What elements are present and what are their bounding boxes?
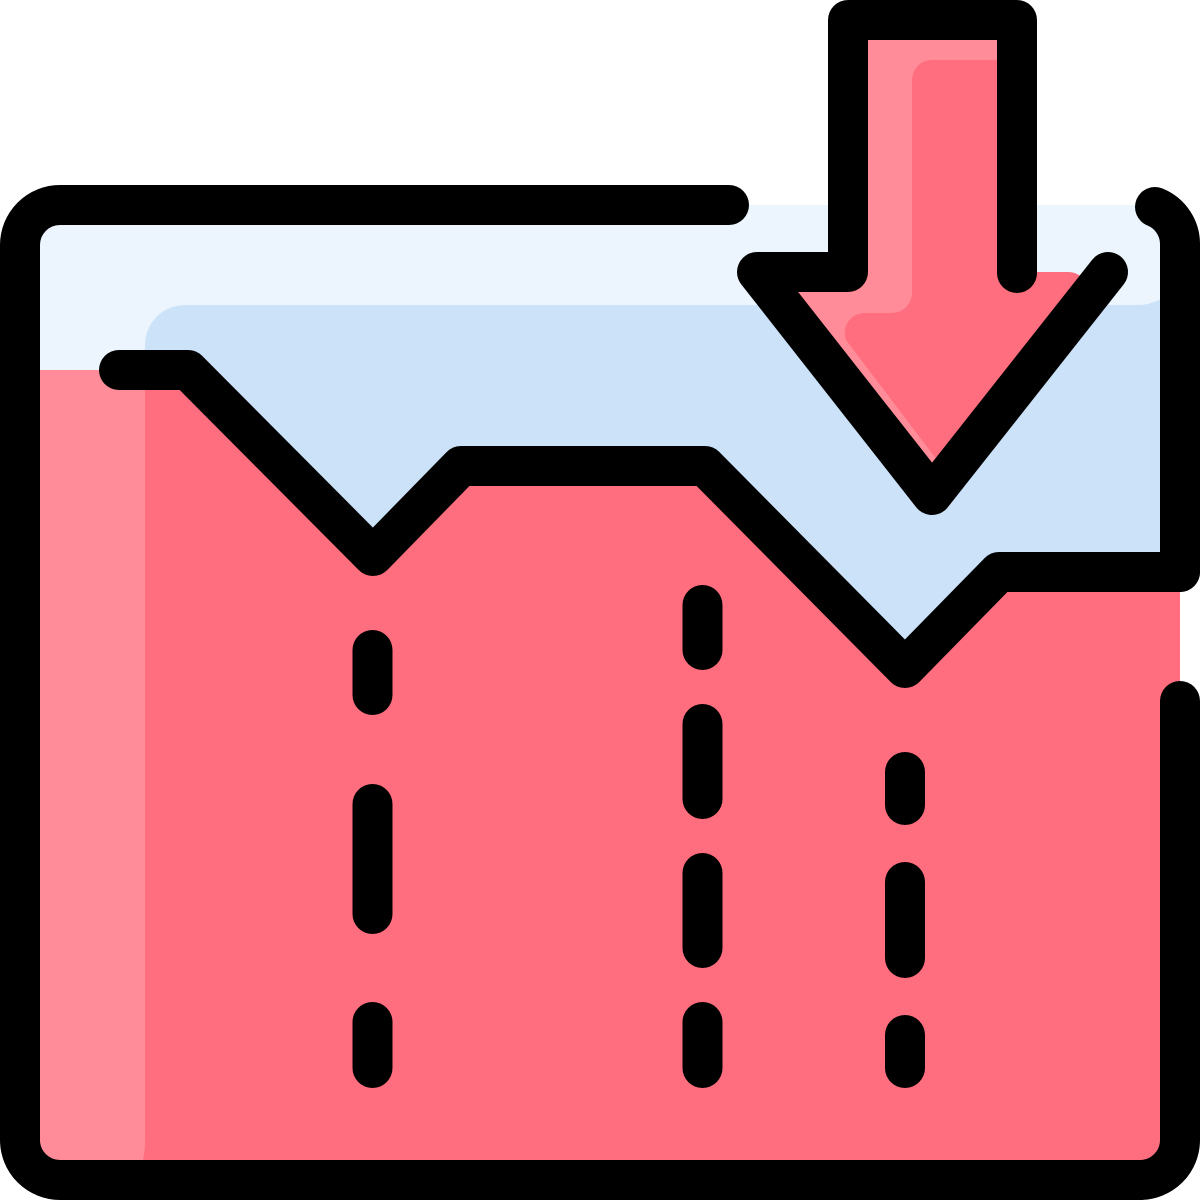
dashed drop line 2 [682,605,722,1068]
panel: red area under the line [20,370,1180,1180]
panel: light blue chart background [20,205,1180,700]
arrow: red down arrow fill [770,20,1084,495]
arrow outline [757,20,1108,495]
dashed drop line 3 [885,772,925,1068]
chart outline frame [20,205,1180,1180]
dashed drop line 1 [352,650,392,1068]
chart trend line [119,370,1180,668]
